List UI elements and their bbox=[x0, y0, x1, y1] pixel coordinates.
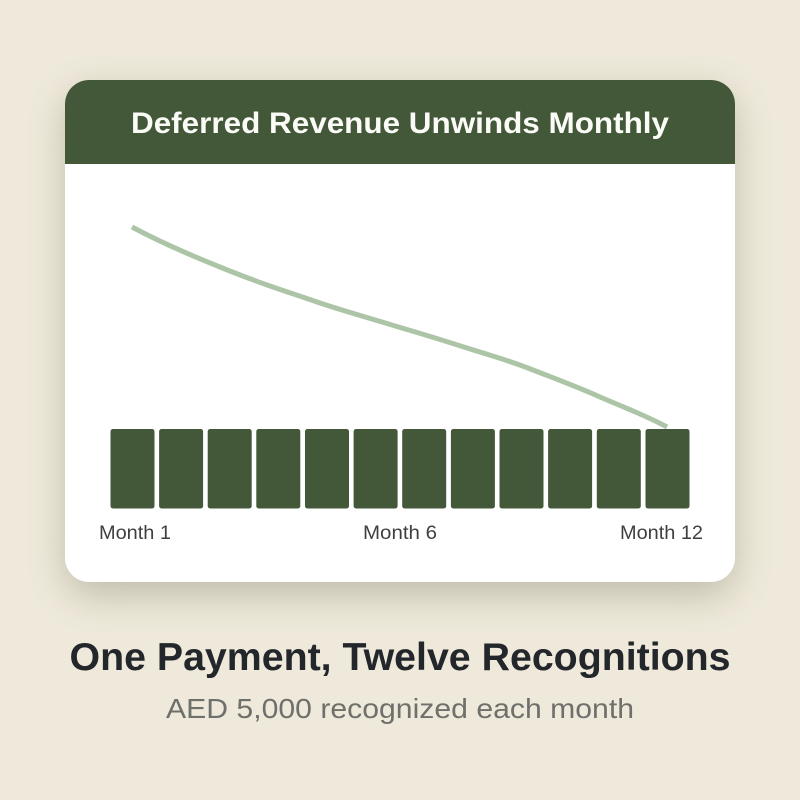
heading: card title: Deferred Revenue Unwinds Monthly bbox=[131, 107, 669, 140]
text: subtitle: AED 5,000 recognized each month bbox=[166, 693, 634, 724]
card header band bbox=[65, 80, 735, 164]
chart: declining deferred revenue line bbox=[132, 227, 667, 427]
heading: main caption: One Payment, Twelve Recognitions bbox=[70, 636, 730, 679]
axis label: month 6: Month 6 bbox=[363, 523, 437, 544]
axis label: month 12: Month 12 bbox=[620, 523, 703, 544]
chart: twelve monthly recognition bars bbox=[110, 429, 690, 508]
panel: chart card bbox=[65, 80, 735, 582]
axis label: month 1: Month 1 bbox=[99, 523, 171, 544]
